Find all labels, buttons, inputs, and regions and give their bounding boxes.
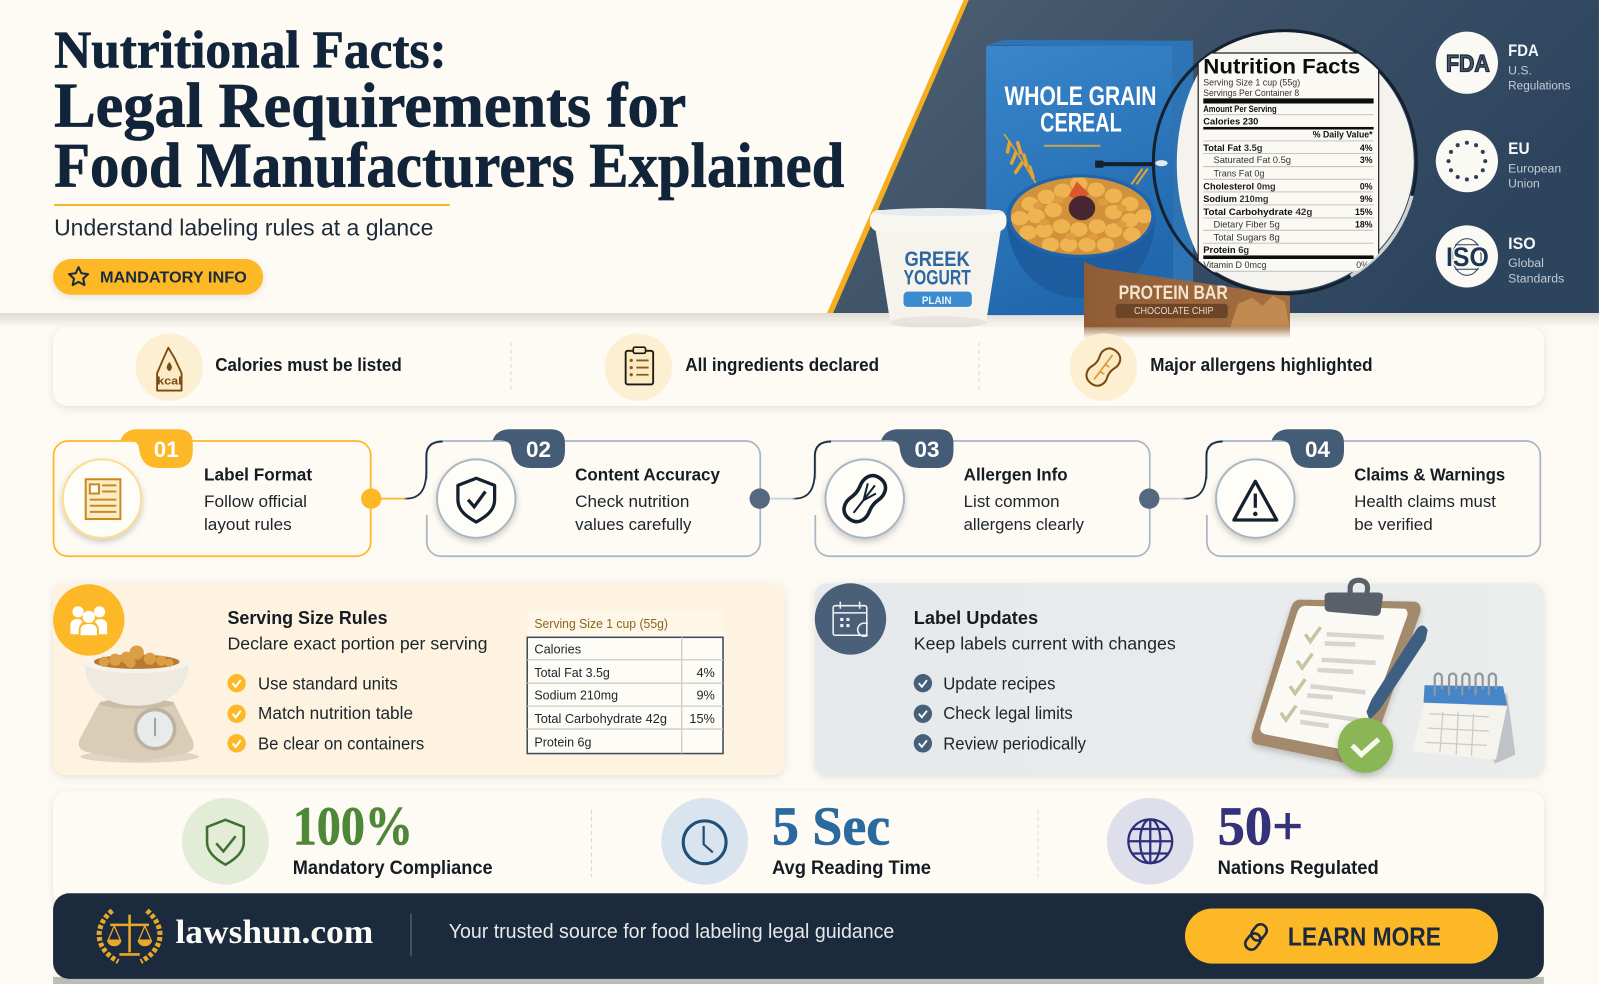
stat: reading time (661, 795, 931, 885)
updates checklist: Update recipes (943, 673, 1056, 693)
nutrition facts label: 0% (1360, 182, 1373, 192)
step 01 icon (63, 459, 141, 538)
step 01 text: Follow official (204, 492, 307, 511)
serving checklist: Be clear on containers (258, 733, 425, 753)
pen (1366, 626, 1428, 720)
step 03 card (813, 429, 1150, 556)
stat: nations regulated: 50+ (1218, 795, 1303, 856)
step 03 text (964, 464, 1085, 534)
icon: ingredient list (605, 333, 672, 401)
nutrition facts label: Total Carbohydrate 42g (1203, 207, 1312, 217)
benefit text: calories: Calories must be listed (215, 354, 402, 375)
serving nutrition table: 4% (696, 665, 715, 680)
panel: label updates (815, 580, 1544, 775)
updates heading: Label Updates (914, 607, 1038, 628)
stat: nations regulated (1107, 795, 1379, 885)
nutrition facts label: Servings Per Container 8 (1203, 88, 1299, 98)
yogurt cup (870, 208, 1006, 328)
regulator: ISO: ISO (1508, 235, 1536, 253)
nutrition facts label: Total Sugars 8g (1213, 233, 1280, 243)
serving checklist: Use standard units (258, 673, 398, 693)
step 02 number tab: 02 (526, 437, 551, 462)
cereal box (986, 40, 1193, 315)
regulator: FDA: Regulations (1508, 79, 1570, 93)
serving nutrition table: 9% (696, 688, 715, 703)
nutrition facts label: Nutrition Facts (1203, 54, 1360, 78)
serving nutrition table: 15% (689, 711, 715, 726)
serving description: Declare exact portion per serving (227, 634, 487, 654)
stat: mandatory compliance: 100% (293, 795, 413, 856)
step 03 text: Allergen Info (964, 464, 1068, 484)
step 04 card (1204, 429, 1540, 556)
step 04 text: Claims & Warnings (1354, 464, 1505, 484)
stats panel (53, 791, 1544, 905)
icon: kcal: kcal (157, 375, 182, 387)
protein bar: CHOCOLATE CHIP (1134, 306, 1213, 317)
nutrition facts label: Vitamin D 0mcg (1203, 260, 1267, 270)
nutrition facts label: Total Fat 3.5g (1203, 143, 1262, 153)
icon: kcal (136, 333, 203, 401)
step 02 number tab (493, 429, 565, 468)
nutrition facts label: Trans Fat 0g (1213, 168, 1265, 178)
cereal box: WHOLE GRAIN (1004, 81, 1156, 111)
title: Nutritional Facts: (54, 21, 447, 79)
nutrition facts label: Amount Per Serving (1203, 104, 1277, 114)
footer bar (53, 893, 1544, 979)
step 04 text (1354, 464, 1505, 534)
benefit text: ingredients: All ingredients declared (685, 354, 879, 375)
step 03 icon (826, 459, 904, 538)
nutrition facts label: Protein 6g (1203, 245, 1249, 255)
serving checklist (227, 673, 425, 753)
icon: people (53, 584, 124, 656)
header band (0, 0, 1599, 327)
nutrition facts label: % Daily Value* (1313, 130, 1373, 140)
step 04 number tab: 04 (1305, 437, 1330, 462)
regulator: FDA (1436, 32, 1570, 94)
nutrition facts label: Dietary Fiber 5g (1213, 219, 1280, 229)
connector 3 to 4 (1139, 442, 1223, 509)
step 01 text (204, 464, 312, 534)
protein bar (1084, 262, 1290, 332)
regulator: ISO: Global (1508, 256, 1544, 270)
stat: mandatory compliance (182, 795, 493, 885)
step 02 text (575, 464, 720, 534)
icon: calendar refresh (815, 583, 886, 655)
title: Legal Requirements for (54, 70, 686, 140)
stat: mandatory compliance: Mandatory Compliance (293, 857, 493, 879)
step 03 number tab: 03 (914, 437, 939, 462)
regulator: ISO: Standards (1508, 271, 1564, 285)
magnifier with nutrition label (1095, 31, 1416, 294)
icon: peanut (1070, 333, 1137, 401)
wheat decoration (1004, 135, 1147, 184)
nutrition facts label: 15% (1355, 207, 1373, 217)
regulator: ISO: ISO (1446, 242, 1489, 272)
step 01 number tab: 01 (154, 437, 179, 462)
green check badge (1338, 718, 1393, 773)
updates checklist: Check legal limits (943, 703, 1073, 723)
panel: serving size rules (53, 583, 784, 775)
nutrition facts label: Sodium 210mg (1203, 194, 1269, 204)
button: learn more: LEARN MORE (1288, 923, 1441, 951)
connector 2 to 3 (750, 442, 831, 509)
regulator: ISO (1436, 225, 1564, 288)
nutrition facts label: Serving Size 1 cup (55g) (1203, 78, 1300, 88)
yogurt cup: GREEK (905, 247, 970, 271)
step 01 card (54, 429, 371, 556)
serving heading: Serving Size Rules (227, 607, 388, 628)
header dark panel (831, 0, 1599, 313)
nutrition facts label: 4% (1360, 143, 1373, 153)
serving nutrition table: Serving Size 1 cup (55g) (534, 616, 668, 631)
step 01 text: Label Format (204, 464, 312, 484)
nutrition facts label (1198, 53, 1379, 272)
nutrition facts label: Cholesterol 0mg (1203, 182, 1276, 192)
step 02 text: Content Accuracy (575, 464, 720, 484)
updates checklist: Review periodically (943, 733, 1086, 753)
illustration: clipboard (1252, 580, 1428, 773)
serving nutrition table: Protein 6g (534, 734, 591, 749)
nutrition facts label: 18% (1355, 219, 1373, 229)
benefit text: allergens: Major allergens highlighted (1150, 354, 1373, 375)
step 02 text: Check nutrition (575, 492, 689, 511)
regulator: EU: EU (1508, 140, 1530, 158)
regulator: EU: Union (1508, 177, 1540, 191)
step 04 text: be verified (1354, 515, 1433, 534)
step 03 text: List common (964, 492, 1060, 511)
yogurt cup: PLAIN (922, 295, 951, 307)
nutrition facts label: 9% (1360, 194, 1373, 204)
subtitle: Understand labeling rules at a glance (54, 215, 433, 241)
benefit strip (53, 327, 1544, 406)
regulator: FDA: FDA (1446, 50, 1490, 77)
magnifier handle (1095, 160, 1168, 168)
stat: nations regulated: Nations Regulated (1218, 857, 1379, 879)
illustration: desk calendar (1412, 674, 1515, 764)
serving nutrition table: Sodium 210mg (534, 688, 618, 703)
connector 1 to 2 (361, 442, 443, 509)
protein bar: PROTEIN BAR (1119, 282, 1228, 304)
serving checklist: Match nutrition table (258, 703, 413, 723)
stat: reading time: 5 Sec (772, 795, 890, 856)
stat: reading time: Avg Reading Time (772, 857, 931, 879)
cereal bowl (1006, 174, 1155, 298)
logo: scales and laurel (99, 911, 160, 962)
step 02 text: values carefully (575, 515, 692, 534)
footer tagline: Your trusted source for food labeling legal guidance (449, 921, 894, 943)
title (54, 21, 844, 201)
step 01 text: layout rules (204, 515, 292, 534)
updates checklist (914, 673, 1086, 753)
serving nutrition table: Total Carbohydrate 42g (534, 711, 667, 726)
nutrition facts label: Saturated Fat 0.5g (1213, 155, 1291, 165)
updates description: Keep labels current with changes (914, 634, 1176, 654)
nutrition facts label: 3% (1360, 155, 1373, 165)
step 03 text: allergens clearly (964, 515, 1085, 534)
badge: mandatory info (53, 259, 263, 295)
step 04 icon (1216, 459, 1295, 538)
nutrition facts label: Calories 230 (1203, 116, 1259, 126)
badge: mandatory info: MANDATORY INFO (100, 269, 247, 286)
yogurt cup: YOGURT (904, 265, 971, 289)
button: learn more (1185, 909, 1498, 964)
regulator: FDA: U.S. (1508, 63, 1532, 77)
step 01 number tab (120, 429, 193, 468)
step 04 number tab (1272, 429, 1344, 468)
regulator: FDA: FDA (1508, 42, 1539, 60)
serving nutrition table: Calories (534, 642, 581, 657)
serving nutrition table (527, 610, 723, 754)
illustration: kitchen scale with bowl (79, 645, 199, 763)
footer shadow (53, 977, 1544, 984)
title underline (54, 204, 450, 206)
title: Food Manufacturers Explained (54, 131, 844, 201)
footer brand: lawshun.com (175, 914, 373, 951)
step 02 icon (437, 459, 516, 538)
cereal box: CEREAL (1040, 108, 1122, 138)
step 04 text: Health claims must (1354, 492, 1496, 511)
regulator: EU: European (1508, 161, 1561, 175)
step 02 card (424, 429, 760, 556)
regulator: EU (1436, 130, 1561, 192)
serving nutrition table: Total Fat 3.5g (534, 665, 610, 680)
step 03 number tab (881, 429, 953, 468)
nutrition facts label: 0% (1356, 260, 1369, 270)
